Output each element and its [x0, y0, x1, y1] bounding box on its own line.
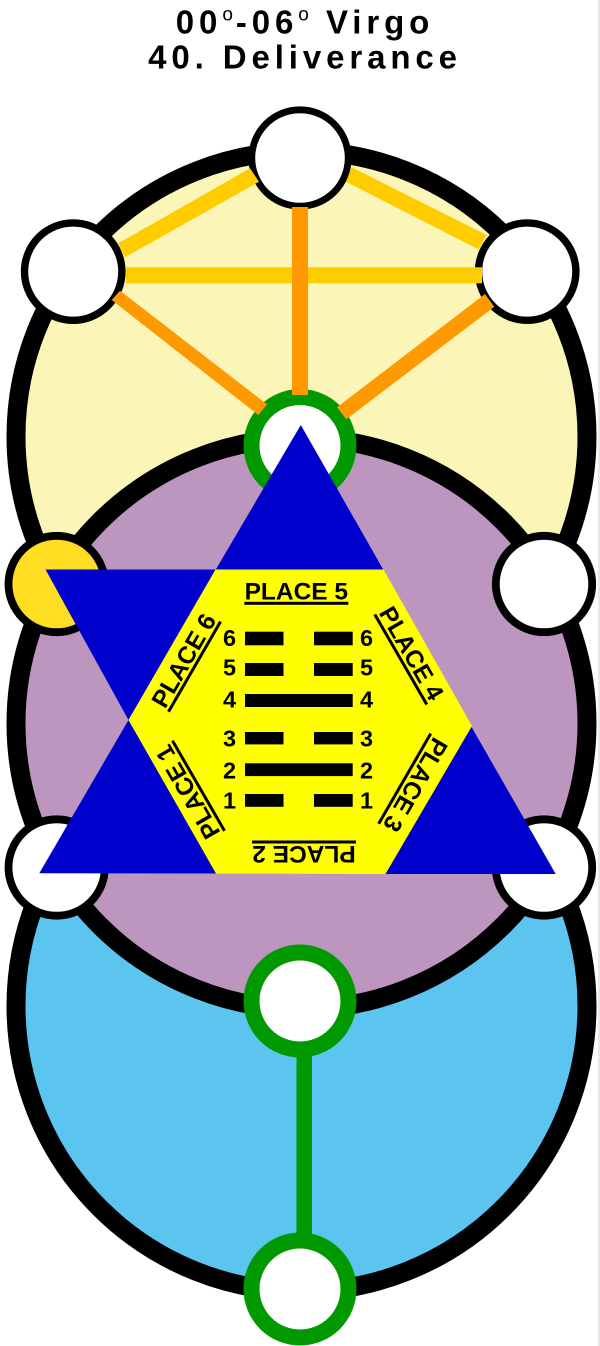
title: -06: [236, 4, 298, 40]
hexagram line bars: [245, 632, 353, 807]
gold connector lines: [118, 167, 487, 283]
lower right white node: [496, 819, 592, 916]
green connector line: [296, 1050, 312, 1240]
right line numbers: 1: [360, 788, 373, 814]
orange connector lines: [112, 207, 494, 419]
title: [148, 4, 462, 75]
right line numbers: 3: [360, 726, 373, 752]
label: place 4: PLACE 4: [373, 602, 449, 706]
label: place 2: PLACE 2: [252, 840, 356, 867]
blue star triangles: [39, 425, 556, 874]
middle circle: purple: [16, 438, 587, 1009]
yellow hexagon: [128, 570, 472, 874]
right line numbers: 4: [360, 686, 373, 712]
right line numbers: 6: [360, 625, 373, 651]
upper left white node: [24, 223, 122, 320]
upper circle: yellow: [16, 151, 587, 722]
label: place 1: PLACE 1: [151, 740, 226, 843]
title: Virgo: [312, 4, 434, 40]
title: o: [222, 4, 236, 26]
left line numbers: 1: [223, 788, 236, 814]
middle right white node: [496, 536, 592, 632]
right line numbers: [360, 625, 373, 814]
right line numbers: 2: [360, 757, 373, 783]
left line numbers: 2: [223, 757, 236, 783]
left line numbers: 3: [223, 726, 236, 752]
bottom green node: [252, 1240, 348, 1338]
right line numbers: 5: [360, 654, 373, 680]
left line numbers: 5: [223, 654, 236, 680]
title: 00: [176, 4, 222, 40]
label: place 3: PLACE 3: [377, 733, 452, 836]
label: place 5: PLACE 5: [245, 578, 348, 605]
left line numbers: 6: [223, 625, 236, 651]
lower circle: blue: [16, 720, 587, 1292]
title: 40. Deliverance: [148, 38, 462, 75]
lower left white node: [8, 819, 105, 916]
left line numbers: [223, 625, 236, 814]
label: place 6: PLACE 6: [147, 609, 222, 713]
middle green node: [252, 952, 348, 1050]
left line numbers: 4: [223, 686, 236, 712]
upper right white node: [478, 223, 576, 320]
middle left yellow node: [8, 536, 105, 632]
upper green node: [252, 397, 348, 494]
top white node: [252, 110, 348, 206]
title: o: [298, 4, 312, 26]
